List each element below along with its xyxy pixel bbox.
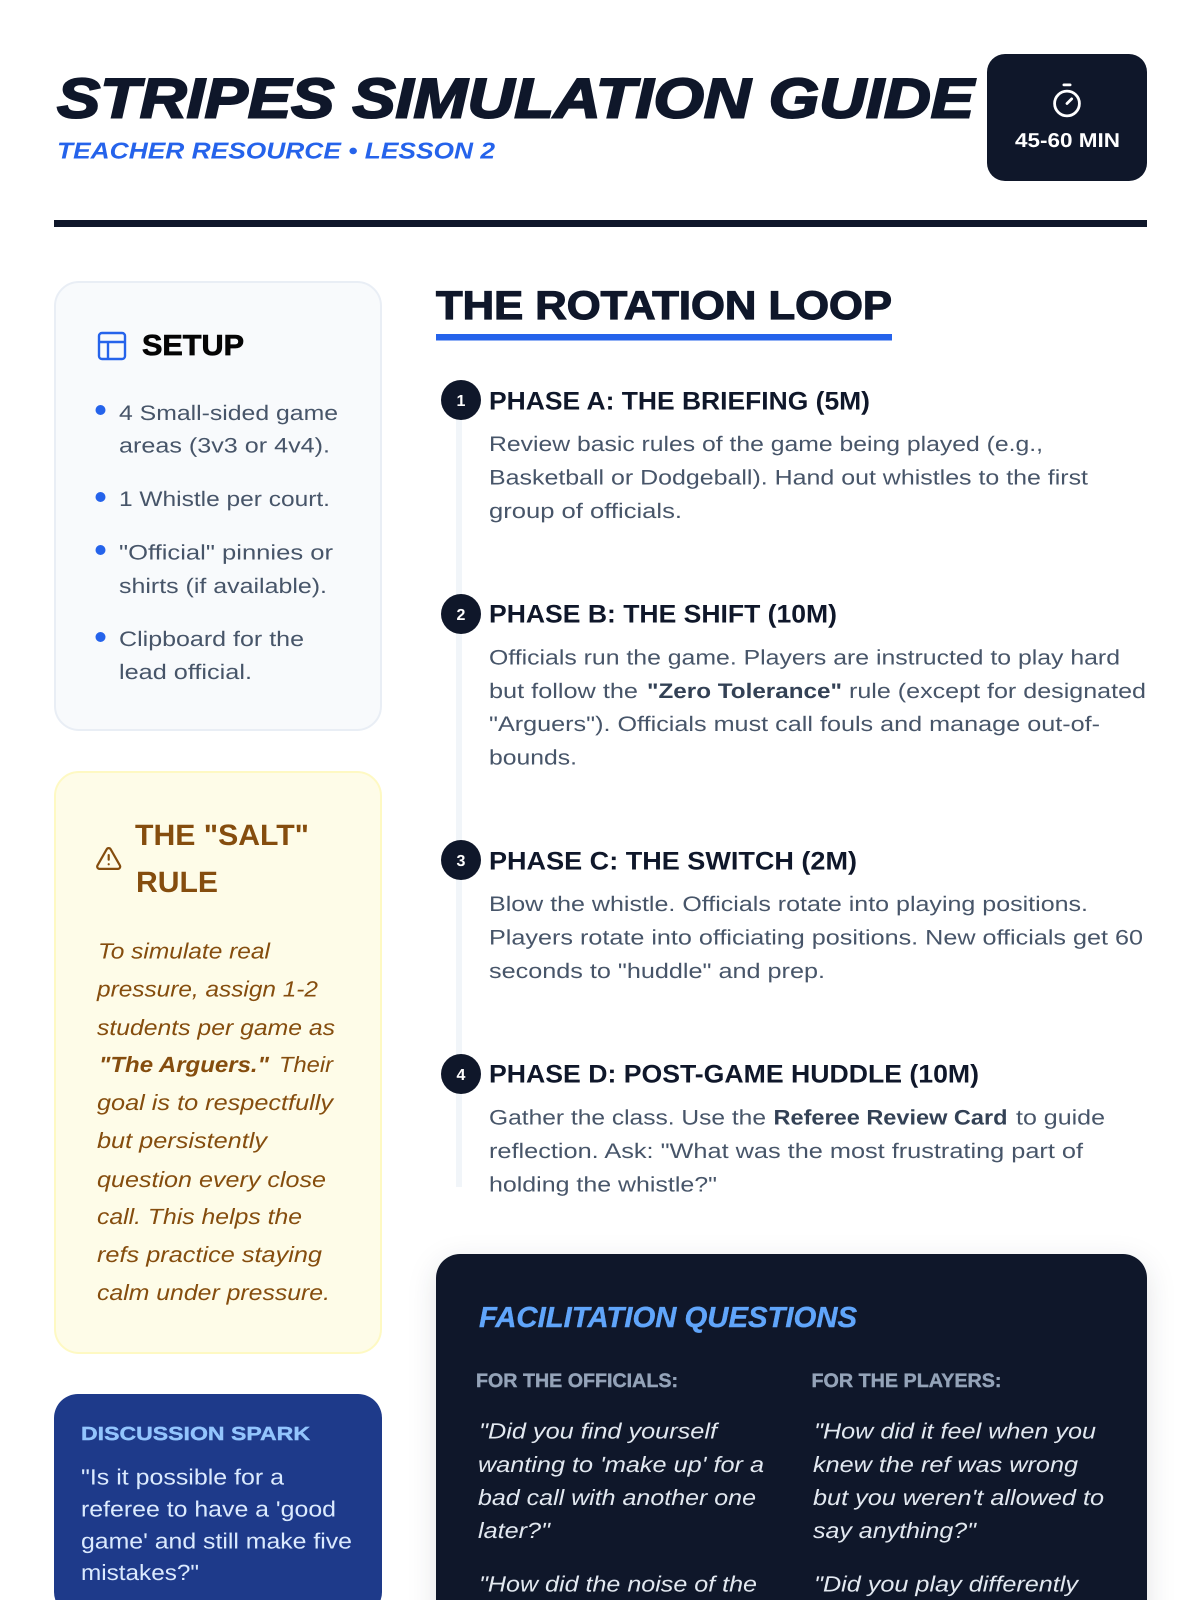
phase d text: to guide bbox=[1016, 1106, 1105, 1130]
title: STRIPES SIMULATION GUIDE bbox=[57, 66, 976, 130]
step number 1: 1 bbox=[457, 393, 466, 410]
time badge bbox=[987, 54, 1147, 181]
column: for the players bbox=[812, 1370, 1104, 1596]
phase b heading: PHASE B: THE SHIFT (10M) bbox=[489, 600, 837, 628]
phase a text: group of officials. bbox=[489, 500, 682, 523]
phase c text: Blow the whistle. Officials rotate into playing positions. bbox=[489, 893, 1088, 916]
step number 3 bbox=[441, 840, 481, 880]
salt rule text: goal is to respectfully bbox=[97, 1090, 335, 1115]
setup list: lead official. bbox=[119, 661, 252, 684]
spark question: mistakes?" bbox=[81, 1560, 199, 1585]
column: for the officials: FOR THE OFFICIALS: bbox=[476, 1370, 678, 1392]
column: for the officials: wanting to 'make up' for a bbox=[478, 1452, 764, 1477]
column: for the players: "Did you play differently bbox=[814, 1572, 1080, 1596]
phase d text: Referee Review Card bbox=[774, 1106, 1008, 1130]
phase a heading: PHASE A: THE BRIEFING (5M) bbox=[489, 388, 870, 416]
salt rule text: students per game as bbox=[97, 1015, 335, 1040]
column: for the officials: bad call with another one bbox=[478, 1485, 756, 1510]
setup list: 4 Small-sided game bbox=[119, 402, 338, 425]
phase a text bbox=[489, 433, 1088, 523]
salt rule text bbox=[96, 938, 335, 1305]
column: for the players: but you weren't allowed to bbox=[813, 1485, 1104, 1510]
phase c text: Players rotate into officiating positions. New officials get 60 bbox=[489, 926, 1143, 950]
phase d bbox=[441, 1054, 1105, 1196]
phase a text: Basketball or Dodgeball). Hand out whistles to the first bbox=[489, 466, 1088, 490]
facilitation heading: FACILITATION QUESTIONS bbox=[479, 1302, 858, 1334]
phase d text bbox=[489, 1106, 1105, 1196]
setup list: areas (3v3 or 4v4). bbox=[119, 434, 330, 458]
spark heading: DISCUSSION SPARK bbox=[81, 1424, 310, 1445]
column: for the players: "How did it feel when you bbox=[814, 1418, 1096, 1444]
step number 1 bbox=[441, 380, 481, 420]
salt rule text: calm under pressure. bbox=[97, 1280, 330, 1305]
icon: warning triangle bbox=[97, 848, 120, 869]
salt rule text: "The Arguers." bbox=[99, 1052, 270, 1077]
salt rule text: question every close bbox=[97, 1167, 326, 1192]
phase b text: bounds. bbox=[489, 746, 577, 770]
heading: the rotation loop: THE ROTATION LOOP bbox=[436, 284, 892, 328]
column: for the officials bbox=[476, 1370, 764, 1596]
salt heading: RULE bbox=[136, 866, 218, 899]
phase d text: reflection. Ask: "What was the most frustrating part of bbox=[489, 1140, 1083, 1163]
setup list: 1 Whistle per court. bbox=[119, 488, 330, 511]
panel: salt rule bbox=[55, 772, 381, 1353]
step number 2 bbox=[441, 594, 481, 634]
column: for the officials: "How did the noise of the bbox=[479, 1572, 757, 1596]
panel: discussion spark bbox=[54, 1394, 382, 1600]
salt heading: THE "SALT" bbox=[135, 819, 309, 852]
salt rule text: pressure, assign 1-2 bbox=[96, 976, 318, 1002]
salt rule text: To simulate real bbox=[98, 938, 271, 964]
icon: layout bbox=[99, 333, 125, 359]
step number 3: 3 bbox=[457, 853, 466, 870]
phase c heading: PHASE C: THE SWITCH (2M) bbox=[489, 848, 857, 876]
phase a bbox=[441, 380, 1088, 523]
phase a text: Review basic rules of the game being played (e.g., bbox=[489, 433, 1043, 456]
step number 4: 4 bbox=[457, 1067, 466, 1084]
badge label: 45-60 MIN bbox=[1015, 130, 1120, 152]
setup list: Clipboard for the bbox=[119, 628, 304, 651]
phase d text: Gather the class. Use the bbox=[489, 1106, 766, 1130]
spark question: referee to have a 'good bbox=[81, 1496, 336, 1522]
phase b bbox=[441, 594, 1146, 770]
phase b text: but follow the bbox=[489, 680, 638, 703]
column: for the officials: "Did you find yourself bbox=[479, 1418, 720, 1444]
setup list: shirts (if available). bbox=[119, 575, 327, 598]
phase b text bbox=[489, 646, 1146, 770]
icon: stopwatch bbox=[1055, 85, 1079, 116]
salt heading bbox=[135, 819, 309, 899]
phase c text bbox=[489, 893, 1143, 983]
salt rule text: but persistently bbox=[97, 1128, 269, 1153]
salt rule text: call. This helps the bbox=[97, 1204, 302, 1229]
phase c text: seconds to "huddle" and prep. bbox=[489, 960, 825, 983]
spark question: game' and still make five bbox=[81, 1528, 352, 1554]
header bbox=[57, 54, 1147, 181]
phase b text: Officials run the game. Players are instructed to play hard bbox=[489, 646, 1120, 670]
phase b text: "Zero Tolerance" bbox=[647, 680, 842, 703]
setup list: "Official" pinnies or bbox=[119, 542, 333, 564]
salt rule text: refs practice staying bbox=[97, 1242, 323, 1267]
step number 2: 2 bbox=[457, 607, 466, 624]
phase d text: holding the whistle?" bbox=[489, 1174, 717, 1196]
column: for the players: knew the ref was wrong bbox=[813, 1452, 1079, 1477]
setup list bbox=[96, 402, 338, 684]
phase b text: "Arguers"). Officials must call fouls and manage out-of- bbox=[489, 713, 1100, 736]
spark question: "Is it possible for a bbox=[81, 1464, 285, 1490]
panel: setup bbox=[55, 282, 381, 730]
phase c bbox=[441, 840, 1143, 983]
step number 4 bbox=[441, 1054, 481, 1094]
phase d heading: PHASE D: POST-GAME HUDDLE (10M) bbox=[489, 1060, 979, 1088]
subtitle: TEACHER RESOURCE • LESSON 2 bbox=[57, 138, 495, 164]
column: for the players: FOR THE PLAYERS: bbox=[812, 1370, 1002, 1392]
spark question bbox=[81, 1464, 352, 1585]
column: for the officials: later?" bbox=[478, 1518, 551, 1543]
panel: facilitation questions bbox=[436, 1254, 1147, 1600]
column: for the players: say anything?" bbox=[813, 1518, 977, 1543]
setup heading: SETUP bbox=[142, 330, 244, 362]
phase b text: rule (except for designated bbox=[849, 680, 1146, 703]
salt rule text: Their bbox=[279, 1052, 335, 1077]
